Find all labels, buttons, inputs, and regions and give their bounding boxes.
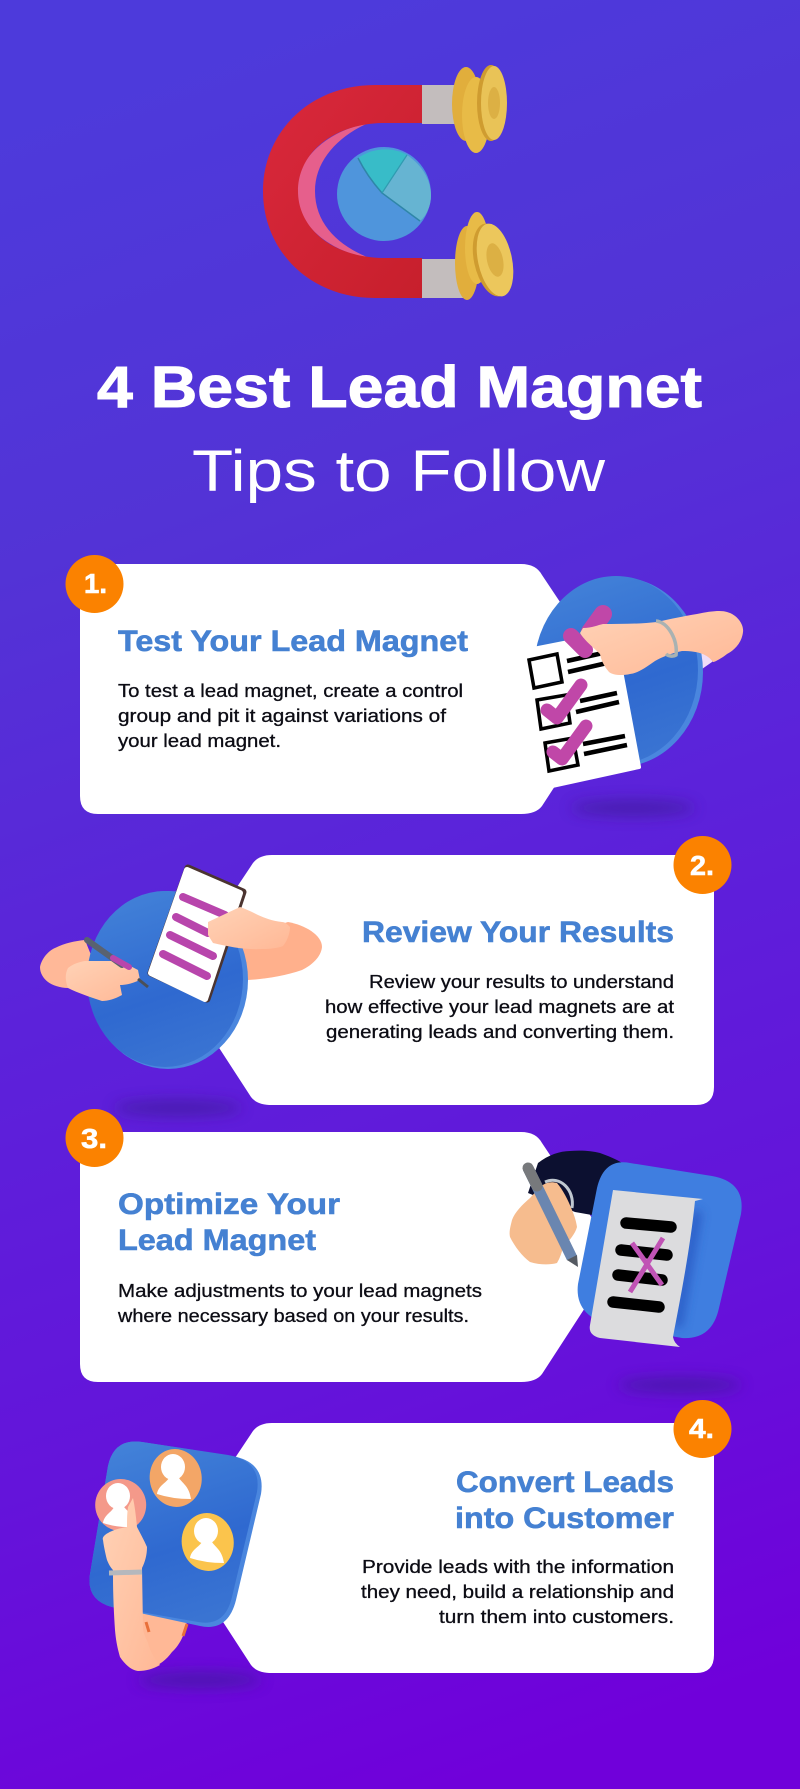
title: Tips to Follow xyxy=(192,439,606,504)
heading xyxy=(455,1466,674,1535)
left hand xyxy=(66,961,140,1001)
blue board xyxy=(89,1442,262,1627)
card xyxy=(80,1132,618,1382)
left forearm xyxy=(40,940,95,988)
body: Make adjustments to your lead magnets xyxy=(118,1281,482,1301)
disc xyxy=(88,891,248,1069)
number badge xyxy=(674,836,732,894)
pen xyxy=(87,940,148,987)
body: they need, build a relationship and xyxy=(361,1582,674,1602)
body xyxy=(361,1557,674,1627)
right hand xyxy=(208,907,290,949)
body: To test a lead magnet, create a control xyxy=(118,681,463,701)
orange avatar xyxy=(146,1446,205,1510)
heading xyxy=(118,1188,340,1257)
panel: step 4 xyxy=(89,1400,731,1688)
heading: Lead Magnet xyxy=(118,1224,316,1257)
panel: step 1: 1. xyxy=(84,568,107,599)
body: your lead magnet. xyxy=(118,731,281,751)
body: Review your results to understand xyxy=(369,972,674,992)
pen xyxy=(528,1168,578,1267)
salmon avatar xyxy=(95,1479,146,1531)
magnet red body xyxy=(263,85,422,298)
heading: into Customer xyxy=(455,1502,674,1535)
lower arm xyxy=(135,1610,187,1668)
panel: step 2 xyxy=(40,836,732,1116)
coins top xyxy=(452,65,507,153)
hand xyxy=(510,1182,577,1264)
body: where necessary based on your results. xyxy=(117,1306,469,1326)
paper xyxy=(518,633,639,788)
panel: step 3 xyxy=(66,1109,742,1393)
disc xyxy=(535,577,703,767)
panel: step 4: 4. xyxy=(689,1413,714,1444)
card xyxy=(175,1423,714,1673)
icon: horseshoe magnet with coins and pie chart xyxy=(263,65,519,300)
heading: Test Your Lead Magnet xyxy=(118,625,468,658)
panel: step 3: 3. xyxy=(81,1123,107,1154)
panel: step 2: 2. xyxy=(690,850,714,881)
body xyxy=(118,681,463,751)
shadow xyxy=(114,1100,242,1116)
icon: hand writing on document xyxy=(510,1151,742,1347)
heading: Optimize Your xyxy=(118,1188,340,1221)
pie chart xyxy=(337,147,431,241)
number badge xyxy=(674,1400,732,1458)
panel: step 1 xyxy=(66,555,743,816)
sleeve xyxy=(690,640,730,670)
body: generating leads and converting them. xyxy=(326,1022,674,1042)
shadow xyxy=(571,800,695,816)
bracelet xyxy=(109,1572,142,1573)
body xyxy=(117,1281,482,1326)
heading: Convert Leads xyxy=(456,1466,674,1499)
bracelet xyxy=(656,621,676,656)
heading: Review Your Results xyxy=(362,916,674,949)
body: group and pit it against variations of xyxy=(118,706,447,726)
paper xyxy=(590,1190,703,1347)
magnet inner surface xyxy=(296,124,372,259)
body: Provide leads with the information xyxy=(362,1557,674,1577)
icon: hand tapping profile avatars xyxy=(89,1442,262,1671)
hand and forearm xyxy=(103,1498,160,1671)
title: 4 Best Lead Magnet xyxy=(97,355,702,420)
number badge xyxy=(66,1109,124,1167)
blue board xyxy=(578,1162,742,1338)
hand xyxy=(580,611,743,675)
yellow avatar xyxy=(178,1510,237,1574)
right forearm xyxy=(225,922,322,980)
coins bottom xyxy=(455,212,519,300)
card xyxy=(175,855,714,1105)
shadow xyxy=(618,1377,742,1393)
icon: checklist on blue disc xyxy=(518,576,743,788)
card xyxy=(80,564,618,814)
body: turn them into customers. xyxy=(439,1607,674,1627)
magnet steel tips xyxy=(422,85,464,298)
title xyxy=(97,355,702,504)
shadow xyxy=(138,1672,262,1688)
phone xyxy=(151,868,243,999)
body: how effective your lead magnets are at xyxy=(325,997,674,1017)
body xyxy=(325,972,674,1042)
sleeve xyxy=(528,1151,622,1215)
icon: hands with phone on blue disc xyxy=(40,868,322,1069)
number badge xyxy=(66,555,124,613)
